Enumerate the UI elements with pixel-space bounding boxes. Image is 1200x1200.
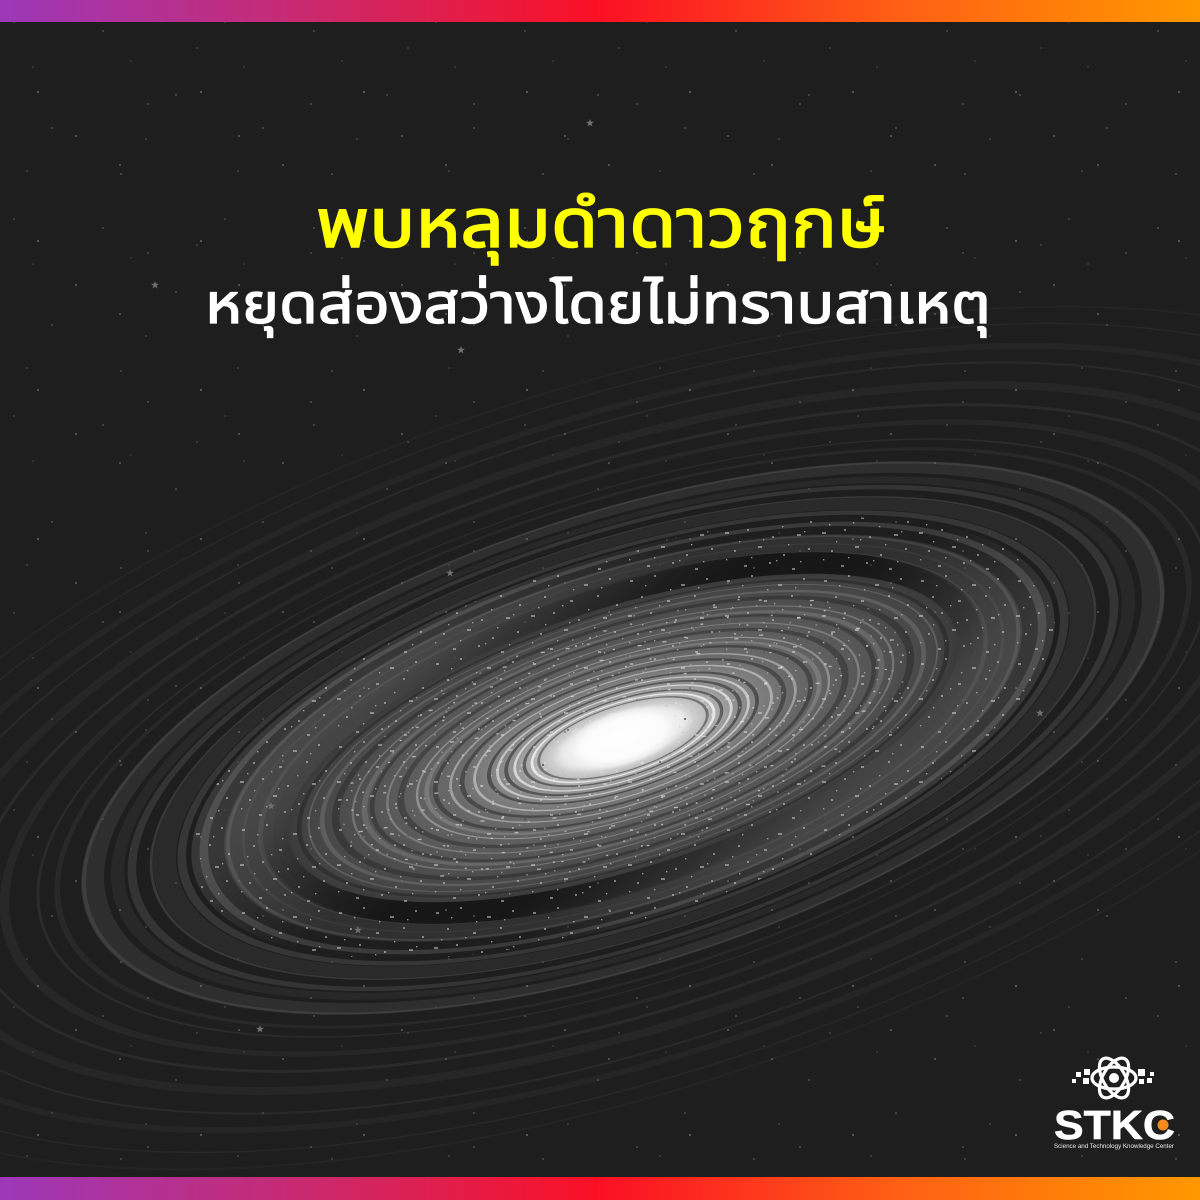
inner disc <box>250 506 996 970</box>
speckled dust <box>139 428 1107 1048</box>
icon: orange dot <box>1158 1120 1168 1130</box>
tagline: Science and Technology Knowledge Center <box>1054 1144 1174 1150</box>
top gradient bar <box>0 0 1200 22</box>
STKC logo <box>1054 1053 1175 1150</box>
larger stars <box>151 119 1044 1032</box>
title <box>205 186 991 337</box>
outer orbit rings <box>0 293 1200 1183</box>
bottom gradient bar <box>0 1177 1200 1200</box>
inner speckled dust <box>302 536 944 940</box>
galaxy spiral disc <box>0 293 1200 1183</box>
title line 1: yellow: พบหลุมดำดาวฤกษ์ <box>316 186 886 265</box>
main outer bands <box>29 357 1200 1119</box>
band under the disc <box>232 487 1014 989</box>
bright core <box>554 692 692 784</box>
icon: atom <box>1072 1053 1154 1103</box>
upper-left and lower-right glow <box>139 428 1107 1048</box>
wordmark: STKC <box>1054 1102 1175 1148</box>
dark crescent gap <box>217 477 1029 999</box>
inner ring bands <box>263 515 983 961</box>
title line 2: white: หยุดส่องสว่างโดยไม่ทราบสาเหตุ <box>205 273 991 337</box>
faint far orbit rings <box>0 307 1200 1169</box>
